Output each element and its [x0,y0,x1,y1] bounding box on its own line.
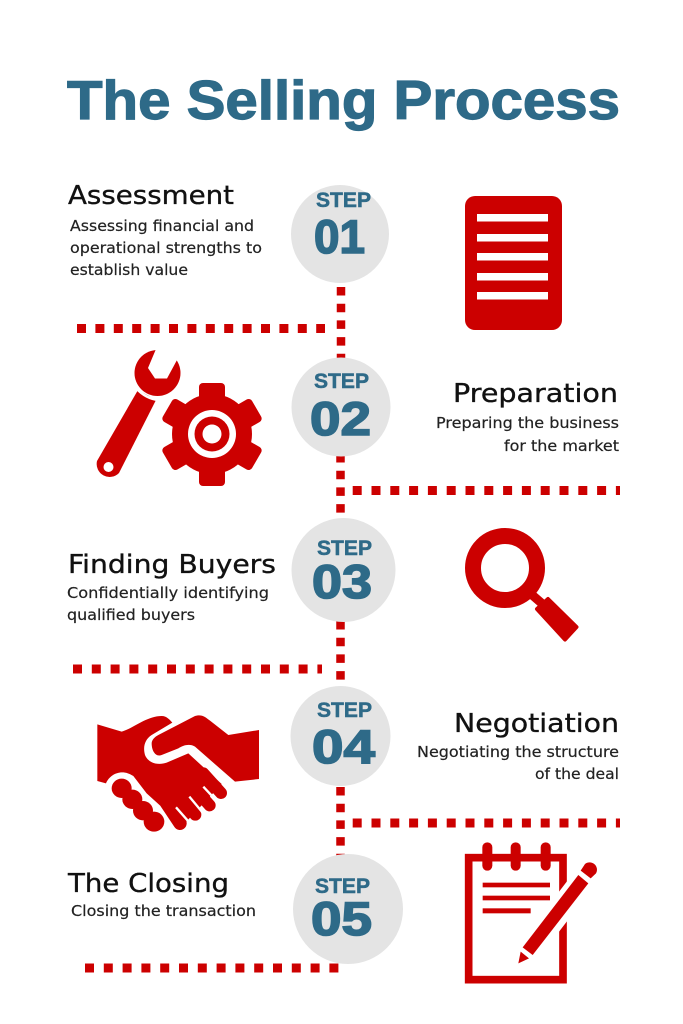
title: The Selling Process [67,69,620,131]
icon: notepad and pencil [469,842,597,980]
step 1 text: Assessment [68,181,262,279]
step 4 badge: STEP [317,699,372,722]
step 1 badge [291,185,389,283]
icon: wrench and gear [97,349,263,486]
step 3 badge: 03 [312,555,372,608]
step 2 text: Preparation: Preparation [453,379,618,409]
step 3 text: Finding Buyers: Finding Buyers [68,550,276,580]
step 5 text: The Closing: The Closing [67,869,229,899]
icon: document [465,196,562,330]
step 2 badge [292,358,390,456]
step 3 text: Finding Buyers: qualified buyers [67,606,195,624]
step 5 text: The Closing [67,869,256,920]
step 5 badge [293,854,403,964]
step 4 badge [290,686,390,786]
step 5 text: The Closing: Closing the transaction [71,902,256,920]
step 3 text: Finding Buyers: Confidentially identifying [67,584,269,602]
step 2 badge: 02 [310,392,371,445]
step 4 badge: 04 [312,720,375,773]
step 4 text: Negotiation [417,709,619,783]
step 5 badge: STEP [315,875,370,898]
step 4 text: Negotiation: Negotiating the structure [417,743,619,761]
step 2 text: Preparation [436,379,619,455]
step 3 badge [292,518,396,622]
step 2 text: Preparation: Preparing the business [436,414,619,432]
step 3 badge: STEP [317,537,372,560]
icon: gear [161,383,263,486]
step 1 text: Assessment: operational strengths to [70,239,262,257]
step 1 badge: STEP [316,189,371,212]
icon: handshake [97,715,259,832]
step 3 text: Finding Buyers [67,550,276,624]
step 1 text: Assessment: establish value [70,261,188,279]
step 5 badge: 05 [311,892,372,945]
step 1 badge: 01 [314,210,365,263]
dotted connectors [73,287,620,968]
step 4 text: Negotiation: Negotiation [454,709,619,739]
step 4 text: Negotiation: of the deal [535,765,619,783]
step 1 text: Assessment: Assessing financial and [70,217,254,235]
step 2 badge: STEP [314,370,369,393]
icon: wrench [97,349,181,477]
step 1 text: Assessment: Assessment [68,181,234,211]
icon: magnifying glass [473,536,576,640]
step 2 text: Preparation: for the market [504,437,619,455]
